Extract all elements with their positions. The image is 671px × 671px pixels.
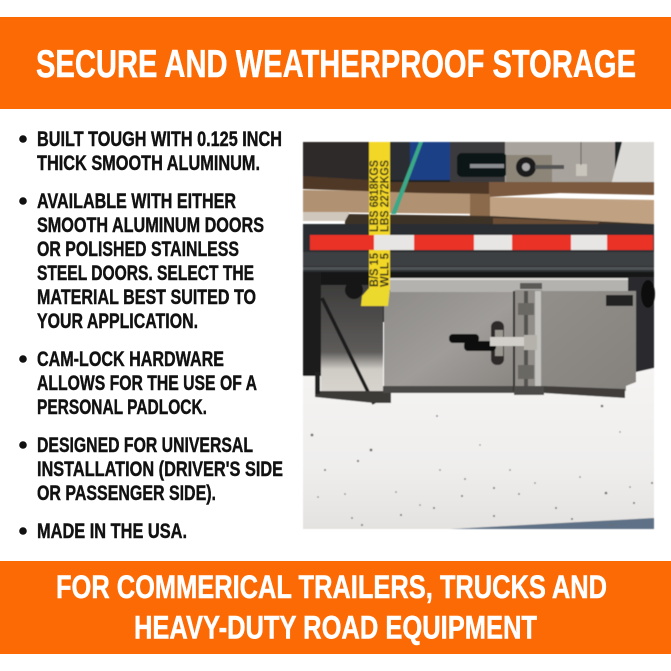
photo: toolbox mounted under trailer: LBS 2272KGS	[378, 160, 392, 232]
bullet: tough aluminum: THICK SMOOTH ALUMINUM.	[37, 150, 260, 175]
bullet: cam-lock hardware: PERSONAL PADLOCK.	[37, 394, 207, 419]
trailer frame	[303, 224, 654, 286]
bullet: tough aluminum: BUILT TOUGH WITH 0.125 INCH	[37, 126, 282, 151]
toolbox	[390, 278, 628, 292]
bullet: universal installation: DESIGNED FOR UNIVERSAL	[37, 432, 253, 457]
green strap	[391, 142, 423, 214]
photo: toolbox mounted under trailer: WLL 5	[378, 253, 392, 287]
yellow cargo strap	[369, 142, 390, 235]
wood beams	[303, 190, 490, 214]
bullet: door materials: SMOOTH ALUMINUM DOORS	[37, 212, 264, 237]
bullet: door materials: AVAILABLE WITH EITHER	[37, 188, 236, 213]
bullet: made in the USA: MADE IN THE USA.	[37, 518, 187, 543]
bullet: universal installation: INSTALLATION (DRIVER'S SIDE	[37, 456, 283, 481]
bullet: universal installation: OR PASSENGER SIDE).	[37, 480, 216, 505]
reflective stripe	[310, 235, 653, 250]
bullet: universal installation	[19, 432, 283, 505]
cam-lock handle	[491, 321, 504, 365]
panel: feature list	[19, 126, 283, 543]
side panel and bracket	[303, 272, 321, 376]
photo: toolbox mounted under trailer: B/S 15	[367, 253, 381, 287]
panel: header banner	[0, 17, 671, 109]
bullet: door materials: STEEL DOORS. SELECT THE	[37, 260, 254, 285]
bullet: tough aluminum	[19, 126, 282, 175]
panel: footer banner	[0, 561, 671, 654]
photo: toolbox mounted under trailer	[303, 142, 655, 529]
bullet: door materials: OR POLISHED STAINLESS	[37, 236, 239, 261]
bullet: door materials: YOUR APPLICATION.	[37, 308, 198, 333]
footer text line 2: HEAVY-DUTY ROAD EQUIPMENT	[134, 610, 537, 646]
ground	[303, 368, 654, 529]
hydraulic cylinder	[457, 153, 507, 177]
bullet: cam-lock hardware	[19, 346, 257, 419]
bullet: door materials: MATERIAL BEST SUITED TO	[37, 284, 256, 309]
photo: toolbox mounted under trailer: LBS 6818KGS	[367, 160, 381, 232]
bullet: cam-lock hardware: ALLOWS FOR THE USE OF A	[37, 370, 257, 395]
bullet: cam-lock hardware: CAM-LOCK HARDWARE	[37, 346, 224, 371]
bullet: door materials	[19, 188, 264, 333]
bullet: made in the USA	[19, 518, 187, 543]
cargo background	[303, 142, 654, 187]
